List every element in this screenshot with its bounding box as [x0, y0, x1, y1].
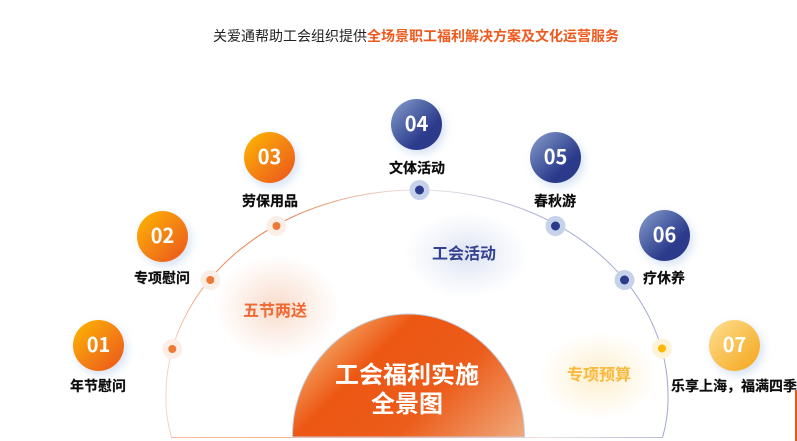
label 01: 年节慰问 [70, 378, 126, 394]
badge 03 [244, 132, 295, 183]
label 06: 疗休养 [643, 270, 685, 286]
node 03 [266, 216, 286, 236]
badge 02: 02 [151, 220, 174, 249]
badge 04: 04 [405, 108, 428, 137]
glow: 工会活动 [405, 212, 529, 298]
node 07 [652, 338, 672, 358]
badge 07 [709, 320, 760, 371]
edge bar [795, 390, 797, 441]
badge 05 [530, 132, 581, 183]
label 03: 劳保用品 [242, 193, 298, 209]
center title: 全景图 [371, 391, 443, 418]
center semicircle [292, 314, 525, 437]
label 05: 春秋游 [534, 193, 576, 209]
glow: 专项预算 [540, 332, 658, 420]
badge 06 [639, 210, 690, 261]
center title [335, 362, 479, 418]
node 02 [200, 270, 220, 290]
badge 02 [137, 211, 188, 262]
badge 04 [391, 99, 442, 150]
node 05 [546, 216, 566, 236]
badge 06: 06 [653, 219, 676, 248]
badge 01: 01 [87, 329, 110, 358]
node 01 [162, 339, 182, 359]
category: 专项预算: 专项预算 [567, 367, 631, 384]
badge 01 [73, 320, 124, 371]
title: 关爱通帮助工会组织提供全场景职工福利解决方案及文化运营服务 [213, 28, 619, 44]
category: 工会活动: 工会活动 [432, 246, 496, 263]
node 06 [614, 270, 634, 290]
arc line [166, 190, 668, 438]
category: 五节两送: 五节两送 [243, 303, 307, 320]
label 02: 专项慰问 [134, 270, 190, 286]
node 04 [410, 180, 430, 200]
glow: 五节两送 [215, 255, 339, 359]
badge 05: 05 [544, 141, 567, 170]
label 07: 乐享上海，福满四季 [671, 378, 797, 394]
label 04: 文体活动 [389, 160, 445, 176]
badge 03: 03 [258, 141, 281, 170]
center title: 工会福利实施 [335, 362, 479, 389]
badge 07: 07 [723, 329, 746, 358]
